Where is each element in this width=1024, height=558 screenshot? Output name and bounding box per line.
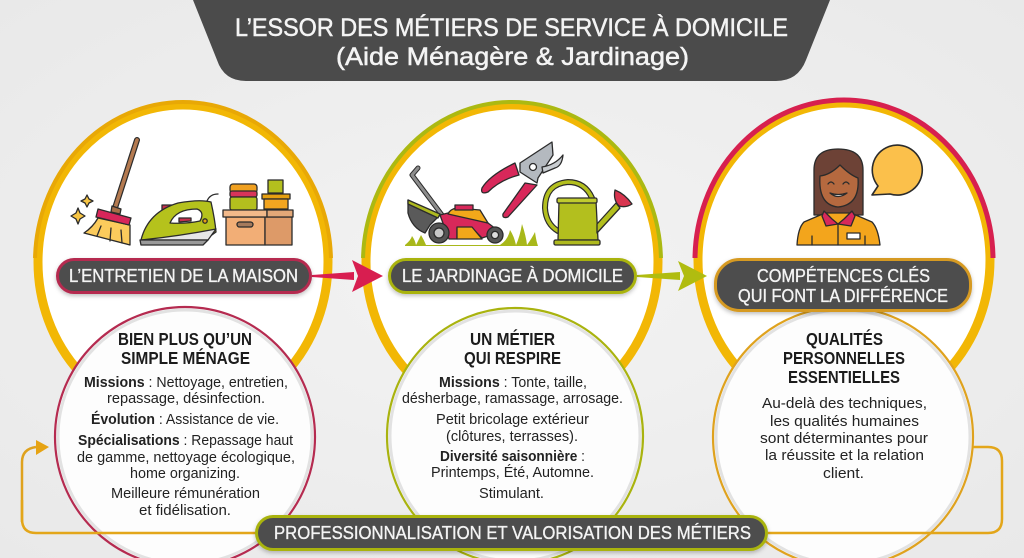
heading: QUALITÉS bbox=[806, 328, 883, 349]
loop arrow: professionnalisation bbox=[22, 440, 49, 522]
panel: qualités personnelles essentielles: les qualités humaines bbox=[770, 413, 919, 430]
panel: qualités personnelles essentielles: PERSONNELLES bbox=[783, 348, 905, 368]
title line 2: (Aide Ménagère & Jardinage) bbox=[336, 43, 689, 71]
pill: compétences clés: COMPÉTENCES CLÉS bbox=[757, 266, 930, 286]
panel: qualités personnelles essentielles: la réussite et la relation bbox=[765, 447, 924, 464]
panel: un métier qui respire: (clôtures, terrasses). bbox=[446, 428, 578, 445]
upper circle 1 bbox=[33, 100, 333, 370]
icon: pruning shears bbox=[482, 142, 563, 218]
panel: title banner bbox=[193, 0, 830, 81]
upper circle 3 bbox=[692, 98, 996, 369]
panel: bien plus qu'un simple ménage: Spécialisations : Repassage haut bbox=[78, 432, 294, 449]
icon: smiling worker bbox=[797, 149, 880, 245]
panel: qualités personnelles essentielles bbox=[713, 307, 973, 558]
icon: watering can bbox=[545, 182, 632, 245]
panel: un métier qui respire bbox=[387, 308, 643, 558]
panel: bien plus qu'un simple ménage: repassage, désinfection. bbox=[107, 390, 265, 407]
panel: un métier qui respire: Stimulant. bbox=[479, 485, 544, 502]
panel: un métier qui respire: QUI RESPIRE bbox=[464, 348, 561, 368]
panel: bien plus qu'un simple ménage: de gamme, nettoyage écologique, bbox=[77, 449, 295, 466]
panel: un métier qui respire: Diversité saisonnière : bbox=[440, 448, 585, 465]
pill: le jardinage à domicile bbox=[390, 260, 636, 292]
panel: bien plus qu'un simple ménage: Meilleure rémunération bbox=[111, 485, 260, 502]
panel: un métier qui respire: désherbage, ramassage, arrosage. bbox=[402, 390, 623, 407]
body text: Au-delà des techniques, bbox=[762, 395, 927, 412]
heading: BIEN PLUS QU’UN bbox=[118, 329, 252, 349]
icon: iron bbox=[140, 194, 218, 245]
body text: Missions : Nettoyage, entretien, bbox=[84, 374, 288, 391]
heading: UN MÉTIER bbox=[470, 328, 555, 349]
pill: l'entretien de la maison bbox=[58, 260, 310, 292]
panel: un métier qui respire: Petit bricolage extérieur bbox=[436, 411, 589, 428]
panel: bien plus qu'un simple ménage: et fidélisation. bbox=[139, 502, 231, 519]
panel: entretien de la maison bbox=[33, 100, 333, 370]
title line 1: L’ESSOR DES MÉTIERS DE SERVICE À DOMICILE bbox=[235, 13, 788, 42]
icon: lawn mower bbox=[405, 168, 538, 246]
banner: professionnalisation bbox=[256, 516, 766, 550]
arrow: entretien to jardinage bbox=[312, 260, 383, 292]
body text: Missions : Tonte, taille, bbox=[439, 374, 587, 391]
arrow: jardinage to compétences bbox=[637, 261, 707, 291]
panel: qualités personnelles essentielles: sont déterminantes pour bbox=[760, 430, 928, 447]
panel: qualités personnelles essentielles: client. bbox=[823, 465, 864, 482]
panel: bien plus qu'un simple ménage: SIMPLE MÉNAGE bbox=[121, 347, 250, 368]
panel: bien plus qu'un simple ménage: home organizing. bbox=[130, 465, 240, 482]
pill: l'entretien de la maison: L’ENTRETIEN DE LA MAISON bbox=[69, 266, 298, 286]
loop line under banner bbox=[22, 447, 1002, 533]
panel: compétences clés bbox=[692, 98, 996, 369]
panel: qualités personnelles essentielles: ESSENTIELLES bbox=[788, 367, 900, 387]
pill: compétences clés bbox=[716, 260, 970, 310]
icon: boxes and folded linen bbox=[223, 180, 293, 245]
panel: bien plus qu'un simple ménage bbox=[55, 307, 315, 558]
pill: le jardinage à domicile: LE JARDINAGE À DOMICILE bbox=[402, 266, 623, 286]
pill: compétences clés: QUI FONT LA DIFFÉRENCE bbox=[738, 286, 948, 306]
panel: jardinage à domicile bbox=[361, 100, 663, 373]
upper circle 2 bbox=[361, 100, 663, 373]
banner: professionnalisation: PROFESSIONNALISATION ET VALORISATION DES MÉTIERS bbox=[274, 523, 751, 543]
icon: broom bbox=[71, 140, 137, 245]
icon: speech bubble bbox=[872, 145, 922, 195]
panel: bien plus qu'un simple ménage: Évolution : Assistance de vie. bbox=[91, 411, 279, 428]
panel: un métier qui respire: Printemps, Été, Automne. bbox=[431, 464, 594, 481]
